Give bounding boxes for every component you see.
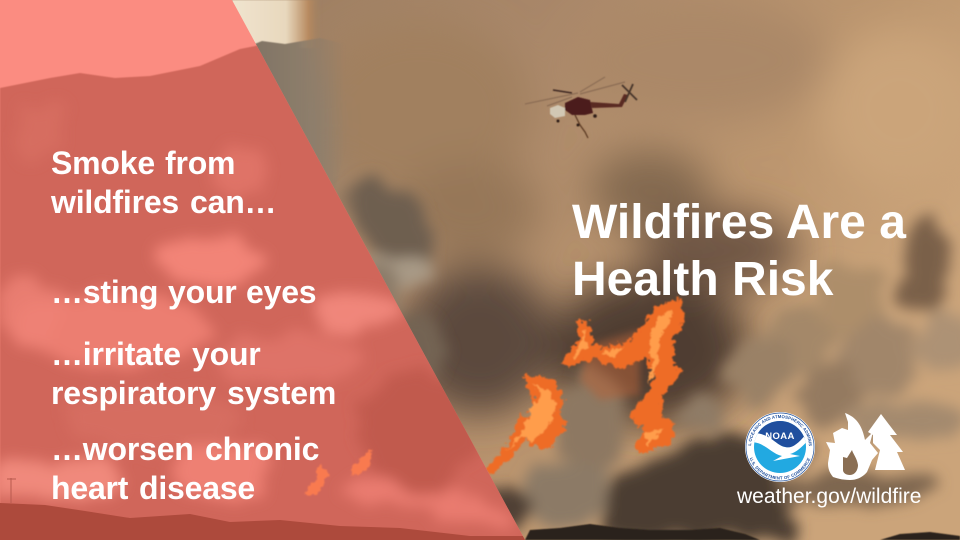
panel heading: Smoke	[51, 145, 155, 181]
effect: respiratory: respiratory	[51, 375, 216, 411]
website link: weather.gov/wildfire	[736, 485, 921, 508]
panel heading: can…	[190, 184, 276, 220]
dark treeline	[525, 524, 960, 540]
main title: Wildfires Are a	[572, 196, 906, 249]
smoke billows	[340, 175, 960, 540]
flames	[487, 300, 683, 472]
icon: fire and tree	[826, 413, 905, 480]
bright sky gap	[232, 0, 322, 48]
main title: Health Risk	[572, 253, 834, 306]
effect: heart: …worsen	[51, 431, 194, 467]
effect: respiratory: system	[227, 375, 336, 411]
effect: respiratory: …irritate	[51, 336, 181, 372]
effect: heart: chronic	[205, 431, 319, 467]
helicopter	[525, 77, 637, 138]
icon: NOAA seal: U.S. DEPARTMENT OF COMMERCE	[750, 457, 810, 480]
panel heading: wildfires	[50, 184, 179, 220]
icon: NOAA seal	[745, 412, 815, 482]
effect: eyes: …sting	[51, 274, 158, 310]
effect: eyes: eyes	[246, 274, 316, 310]
effect: heart: disease	[139, 470, 255, 506]
effect: heart: heart	[51, 470, 129, 506]
panel heading: from	[165, 145, 235, 181]
effect: eyes: your	[168, 274, 237, 310]
mountain in panel	[0, 45, 530, 540]
pale flames in panel	[304, 450, 372, 495]
red translucent panel	[0, 0, 540, 540]
effect: respiratory: your	[192, 336, 261, 372]
ridge behind smoke	[240, 38, 345, 210]
icon: NOAA seal: NATIONAL OCEANIC AND ATMOSPHERIC ADMINISTRATION	[748, 415, 812, 446]
foreground hillside in panel	[0, 503, 530, 540]
icon: NOAA seal: NOAA	[765, 431, 795, 442]
utility pole	[7, 478, 16, 503]
